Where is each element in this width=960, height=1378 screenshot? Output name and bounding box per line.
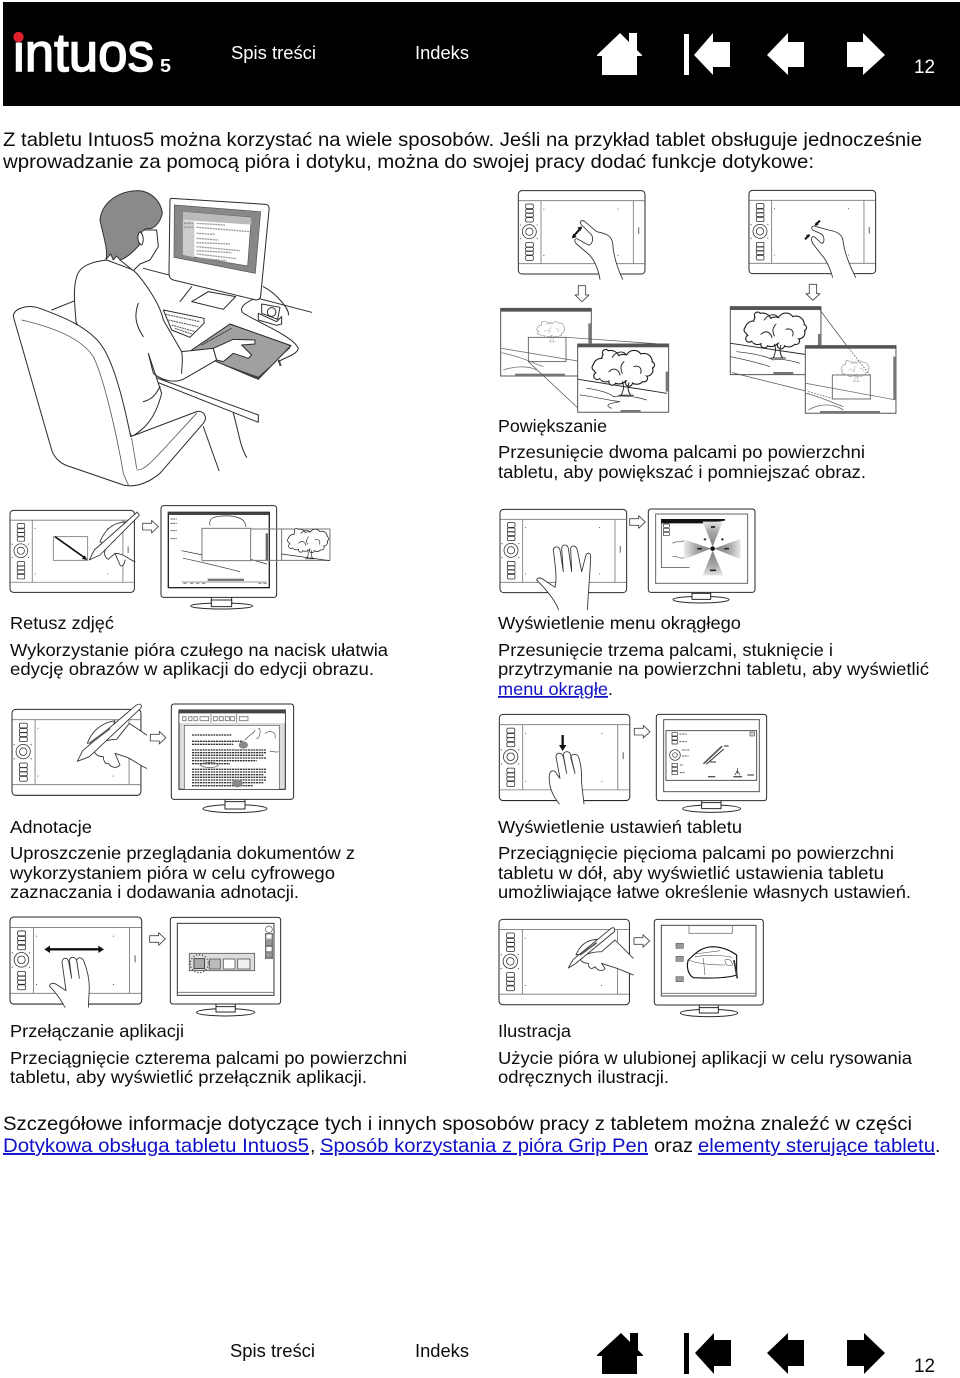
illustration: zoom gesture panels bbox=[501, 190, 896, 413]
caption: app switcher: tabletu, aby wyświetlić przełącznik aplikacji. bbox=[10, 1067, 367, 1087]
illustration: tablet settings bbox=[499, 714, 767, 812]
caption: photo retouch: Wykorzystanie pióra czułego na nacisk ułatwia bbox=[10, 640, 388, 660]
arrow right bbox=[150, 933, 165, 945]
keyboard bbox=[163, 310, 204, 337]
icon: home bbox=[597, 1333, 643, 1374]
arrow right bbox=[143, 520, 158, 533]
arrow right bbox=[150, 731, 166, 744]
link: contents: Spis treści bbox=[230, 1341, 315, 1361]
link: contents: Spis treści bbox=[231, 43, 316, 63]
caption: app switcher: Przełączanie aplikacji bbox=[10, 1021, 184, 1041]
illustration: photo retouch bbox=[10, 506, 330, 609]
person bbox=[74, 191, 255, 437]
caption: photo retouch: edycję obrazów w aplikacji do edycji obrazu. bbox=[10, 659, 374, 679]
desk bbox=[52, 268, 312, 471]
closing text with links: . bbox=[935, 1135, 940, 1157]
arrow down bbox=[806, 284, 820, 300]
link: index: Indeks bbox=[415, 1341, 469, 1361]
caption: drawing bbox=[498, 1021, 912, 1087]
tablet: spread fingers bbox=[518, 191, 645, 279]
closing text with links: Dotykowa obsługa tabletu Intuos5 bbox=[3, 1135, 309, 1157]
link: index: Indeks bbox=[415, 43, 469, 63]
caption: radial menu: przytrzymanie na powierzchni tabletu, aby wyświetlić bbox=[498, 659, 929, 679]
hand on tablet bbox=[213, 339, 255, 362]
caption: radial menu: menu okrągłe. bbox=[498, 679, 613, 699]
webcam dock and cable bbox=[242, 287, 298, 362]
tablet bbox=[192, 324, 291, 379]
tablet with pen bbox=[12, 704, 147, 795]
illustration: annotations bbox=[12, 704, 294, 813]
icon: next page bbox=[847, 1333, 885, 1374]
caption: annotations: Adnotacje bbox=[10, 817, 92, 837]
arrow right bbox=[630, 516, 645, 528]
arrow down bbox=[575, 286, 589, 302]
icon: previous page bbox=[767, 1333, 804, 1374]
monitor with settings bbox=[656, 714, 767, 812]
tablet with hand bbox=[500, 509, 627, 610]
tablet with pen bbox=[499, 919, 633, 1005]
caption: zoom: Przesunięcie dwoma palcami po powierzchni bbox=[498, 442, 865, 462]
tablet with hand bbox=[499, 714, 630, 804]
icon: next page bbox=[847, 33, 885, 75]
zoomed-out window 2 bbox=[805, 346, 896, 413]
tablet: pinch fingers bbox=[749, 190, 876, 277]
caption: zoom: Powiększanie bbox=[498, 416, 607, 436]
illustration: drawing bbox=[499, 919, 763, 1017]
caption: radial menu bbox=[498, 613, 929, 699]
caption: tablet settings: tabletu w dół, aby wyświetlić ustawienia tabletu bbox=[498, 863, 884, 883]
caption: drawing: odręcznych ilustracji. bbox=[498, 1067, 669, 1087]
closing text with links: , bbox=[310, 1135, 315, 1157]
caption: radial menu: Wyświetlenie menu okrągłego bbox=[498, 613, 741, 633]
caption: zoom: tabletu, aby powiększać i pomniejszać obraz. bbox=[498, 462, 866, 482]
page number: 12 bbox=[914, 57, 935, 78]
caption: zoom bbox=[498, 416, 866, 482]
caption: photo retouch: Retusz zdjęć bbox=[10, 613, 114, 633]
closing text with links: Szczegółowe informacje dotyczące tych i innych sposobów pracy z tabletem można znaleźć w części bbox=[3, 1113, 912, 1135]
monitor bbox=[169, 198, 269, 309]
tablet with pen bbox=[10, 510, 139, 592]
arrow right bbox=[634, 725, 650, 738]
caption: app switcher: Przeciągnięcie czterema palcami po powierzchni bbox=[10, 1048, 407, 1068]
photo inset bbox=[282, 529, 330, 561]
logo: intuos 5: intuos bbox=[13, 23, 154, 83]
closing text with links: Sposób korzystania z pióra Grip Pen bbox=[320, 1135, 648, 1157]
icon: previous page bbox=[767, 33, 804, 75]
illustration: person at desk with tablet bbox=[13, 191, 312, 486]
intro text: wprowadzanie za pomocą pióra i dotyku, można do swojej pracy dodać funkcje dotykowe: bbox=[2, 151, 814, 173]
chair bbox=[13, 307, 205, 486]
monitor with car sketch bbox=[654, 919, 763, 1017]
caption: radial menu: Przesunięcie trzema palcami, stuknięcie i bbox=[498, 640, 833, 660]
intro text: Z tabletu Intuos5 można korzystać na wiele sposobów. Jeśli na przykład tablet obsługuje jednocześnie bbox=[3, 129, 922, 151]
monitor with switcher bbox=[170, 917, 281, 1016]
monitor with document bbox=[171, 704, 294, 813]
closing text with links: elementy sterujące tabletu bbox=[698, 1135, 935, 1157]
icon: first page bbox=[684, 33, 730, 75]
intro text bbox=[2, 129, 922, 173]
closing text with links: oraz bbox=[654, 1135, 693, 1157]
page number: 12 bbox=[914, 1356, 935, 1377]
icon: home bbox=[597, 33, 642, 75]
illustration: radial menu bbox=[500, 509, 755, 610]
logo: intuos 5: 5 bbox=[160, 56, 171, 76]
icon: first page bbox=[684, 1333, 731, 1374]
caption: tablet settings: Wyświetlenie ustawień tabletu bbox=[498, 817, 742, 837]
caption: annotations: wykorzystaniem pióra w celu cyfrowego bbox=[9, 863, 335, 883]
caption: tablet settings: umożliwiające łatwe określenie własnych ustawień. bbox=[498, 882, 911, 902]
caption: app switcher bbox=[10, 1021, 407, 1087]
top navigation bar bbox=[3, 2, 960, 106]
caption: annotations: Uproszczenie przeglądania dokumentów z bbox=[10, 843, 355, 863]
caption: tablet settings bbox=[498, 817, 911, 902]
tablet with hand bbox=[10, 917, 142, 1007]
caption: drawing: Ilustracja bbox=[498, 1021, 571, 1041]
illustration: app switcher bbox=[10, 917, 281, 1016]
closing text with links bbox=[3, 1113, 940, 1157]
footer navigation bbox=[230, 1333, 935, 1377]
caption: annotations bbox=[9, 817, 355, 902]
arrow right bbox=[634, 935, 650, 947]
zoomed-out window bbox=[501, 308, 660, 410]
caption: photo retouch bbox=[10, 613, 388, 679]
caption: tablet settings: Przeciągnięcie pięcioma palcami po powierzchni bbox=[498, 843, 894, 863]
zoomed-in window bbox=[578, 344, 669, 412]
monitor with pie menu bbox=[648, 509, 755, 603]
caption: drawing: Użycie pióra w ulubionej aplikacji w celu rysowania bbox=[498, 1048, 912, 1068]
monitor bbox=[161, 506, 282, 609]
zoomed-in window 2 bbox=[730, 307, 847, 392]
caption: annotations: zaznaczania i dodawania adnotacji. bbox=[10, 882, 299, 902]
